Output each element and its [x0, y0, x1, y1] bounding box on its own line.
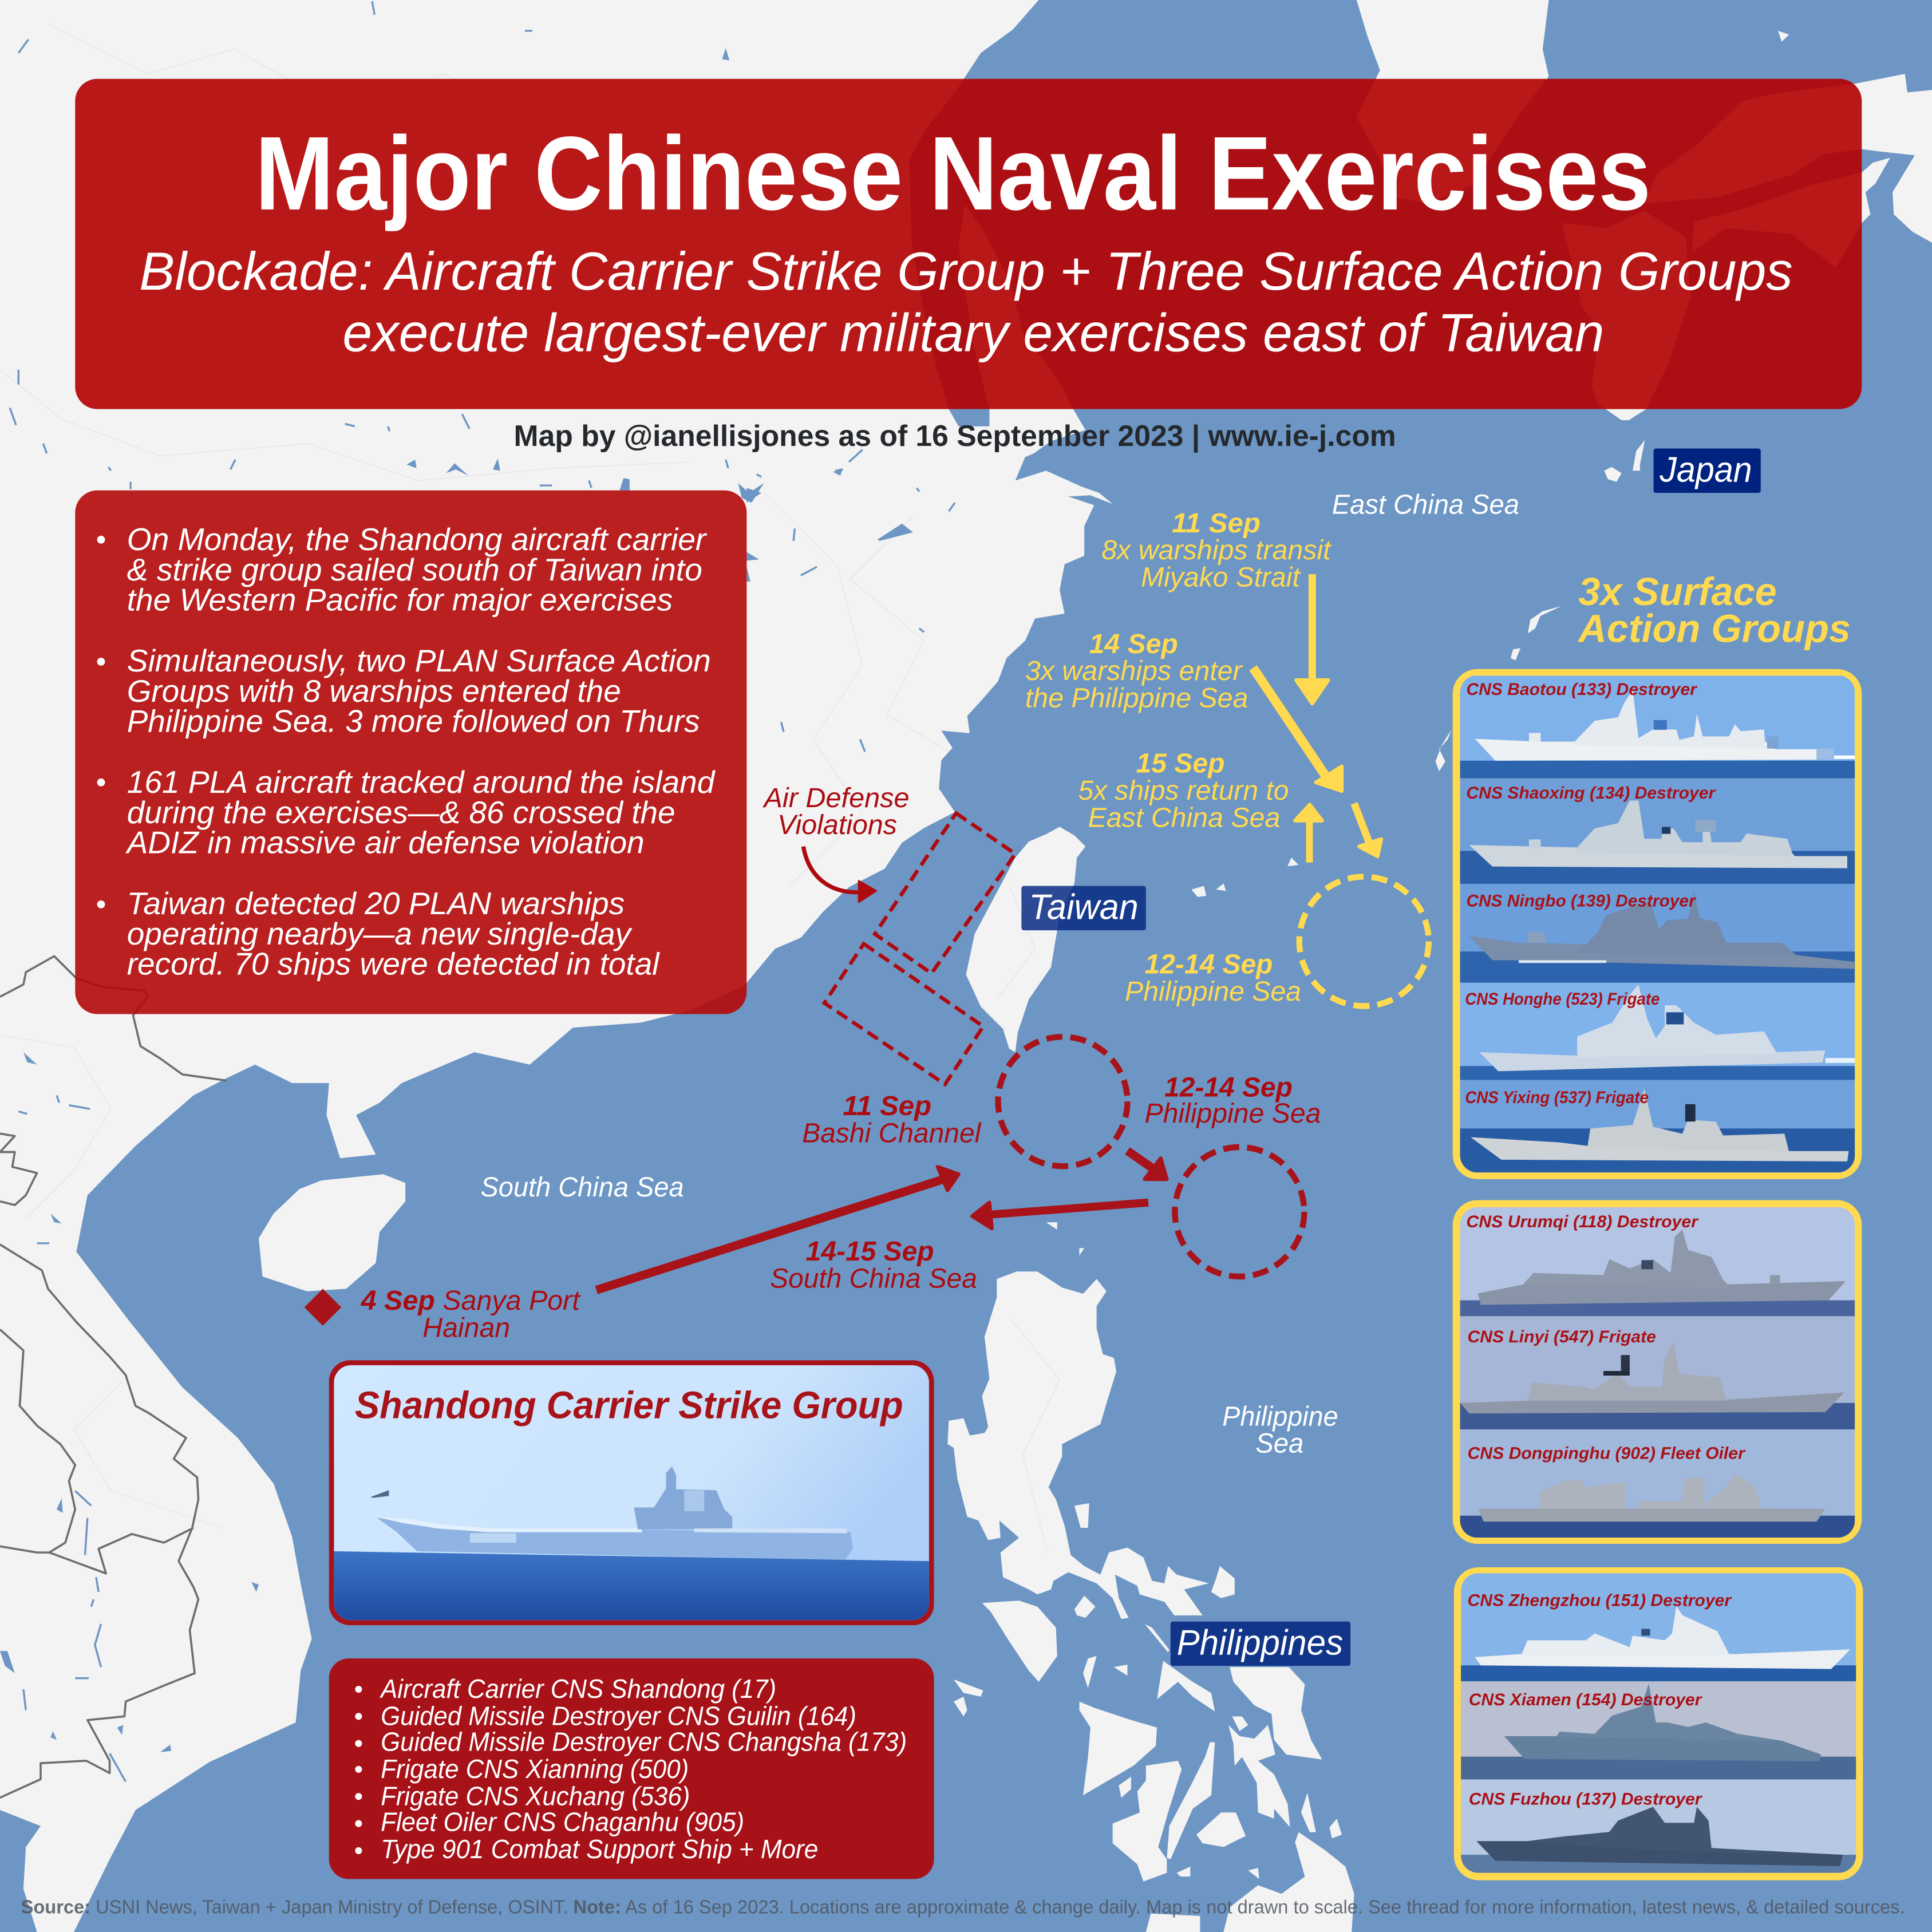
label: Air Defense Violations: Air Defense [762, 783, 909, 813]
ship list text [379, 1674, 907, 1864]
ship names: group 1 [1465, 681, 1716, 1107]
heading: 3x Surface Action Groups [1577, 570, 1851, 650]
inland lakes and rivers [0, 1, 955, 1781]
ship photo: Fuzhou [1460, 1780, 1857, 1873]
label: 12-14 Sep Philippine Sea red [1145, 1072, 1321, 1129]
ship names: group 3: CNS Xiamen (154) Destroyer [1469, 1691, 1702, 1709]
carrier heading: Shandong Carrier Strike Group [355, 1384, 903, 1427]
ship names: group 3: CNS Fuzhou (137) Destroyer [1469, 1790, 1702, 1808]
marker: Sanya port diamond [305, 1289, 341, 1326]
arrow: yellow to circle [1354, 803, 1381, 856]
label: 4 Sep Sanya Port Hainan [361, 1285, 581, 1343]
ship photo: Linyi [1460, 1316, 1855, 1429]
label: 15 Sep return: 5x ships return to [1078, 775, 1289, 806]
label: 4 Sep Sanya Port Hainan: 4 Sep Sanya Port [361, 1285, 581, 1316]
ship names: group 1: CNS Baotou (133) Destroyer [1466, 681, 1698, 699]
label: 12-14 Sep Philippine Sea red: 12-14 Sep [1164, 1072, 1293, 1103]
country label: Taiwan: Taiwan [1029, 887, 1139, 927]
label: 14 Sep enter Philippine Sea: 3x warships enter [1025, 655, 1243, 686]
arrow: yellow return north [1295, 805, 1322, 863]
label: 15 Sep return [1078, 748, 1289, 833]
ship names: group 2: CNS Linyi (547) Frigate [1468, 1328, 1656, 1346]
label: 12-14 Sep Philippine Sea red: Philippine Sea [1145, 1098, 1321, 1129]
bullet: warships detected: Taiwan detected 20 PLAN warships [127, 886, 625, 921]
byline: Map by @ianellisjones as of 16 September 2023 | www.ie-j.com [514, 419, 1396, 453]
ship names: group 3 [1468, 1591, 1732, 1808]
label: 11 Sep Bashi Channel [802, 1091, 982, 1148]
ship photo: Yixing [1460, 1080, 1855, 1172]
ship names: group 2 [1466, 1213, 1745, 1463]
bullet: aircraft tracked: during the exercises—& 86 crossed the [127, 795, 675, 830]
subtitle [139, 241, 1793, 362]
circle: red patrol area Bashi [998, 1037, 1127, 1166]
ship names: group 2: CNS Dongpinghu (902) Fleet Oiler [1468, 1444, 1745, 1463]
bullet: surface action groups: Groups with 8 warships entered the [127, 673, 621, 709]
sea label: South China Sea: South China Sea [480, 1172, 684, 1203]
land: Philippines [947, 1222, 1354, 1932]
ship list text: Guided Missile Destroyer CNS Changsha (173) [381, 1727, 907, 1757]
title: Major Chinese Naval Exercises [255, 114, 1651, 232]
sea label: Philippine Sea: Philippine [1222, 1401, 1338, 1432]
ship list text: Guided Missile Destroyer CNS Guilin (164) [381, 1701, 856, 1730]
zone: air defense violation south [824, 944, 983, 1084]
ship photo: Baotou [1460, 675, 1855, 779]
label: 14-15 Sep South China Sea: 14-15 Sep [806, 1236, 934, 1267]
label: 11 Sep Miyako Strait: 8x warships transit [1101, 535, 1332, 566]
ship list text: Frigate CNS Xuchang (536) [381, 1781, 690, 1811]
label: 14 Sep enter Philippine Sea: the Philippine Sea [1025, 682, 1248, 713]
panel: Shandong carrier photo [329, 1360, 934, 1625]
label: 15 Sep return: 15 Sep [1136, 748, 1225, 779]
label: 15 Sep return: East China Sea [1088, 802, 1280, 833]
bullet: surface action groups: Philippine Sea. 3 more followed on Thurs [127, 704, 700, 739]
label: 12-14 Sep Philippine Sea yellow [1125, 949, 1301, 1007]
label: Air Defense Violations: Violations [777, 809, 897, 840]
subtitle: Blockade: Aircraft Carrier Strike Group + Three Surface Action Groups [139, 241, 1793, 301]
ship names: group 1: CNS Honghe (523) Frigate [1465, 990, 1660, 1009]
arrow: red Sanya to Bashi [596, 1167, 959, 1290]
land: mainland China and Southeast Asia [0, 0, 1094, 1932]
ship list bullets [355, 1686, 362, 1854]
arrow: yellow diagonal [1253, 668, 1342, 791]
label: 11 Sep Bashi Channel: Bashi Channel [802, 1117, 982, 1148]
inland provincial lines [0, 25, 1060, 1552]
bullet: surface action groups: Simultaneously, two PLAN Surface Action [127, 643, 711, 678]
label: 14-15 Sep South China Sea [770, 1236, 977, 1294]
label: 11 Sep Miyako Strait: 11 Sep [1172, 508, 1261, 539]
ship names: group 3: CNS Zhengzhou (151) Destroyer [1468, 1591, 1732, 1610]
bullet: warships detected: record. 70 ships were detected in total [127, 946, 660, 982]
bullet: Shandong sailed [97, 521, 708, 618]
circle: red patrol area Philippine Sea [1175, 1147, 1304, 1277]
land: Hainan [259, 1174, 405, 1291]
arrow: yellow Miyako Strait [1296, 574, 1328, 704]
ship names: group 1: CNS Ningbo (139) Destroyer [1466, 892, 1696, 910]
label: 11 Sep Miyako Strait: Miyako Strait [1141, 562, 1301, 593]
country label: Japan: Japan [1659, 450, 1752, 490]
land: Korea [1357, 0, 1549, 203]
panel: surface action group 2 [1453, 1200, 1862, 1544]
bullet: Shandong sailed: On Monday, the Shandong aircraft carrier [127, 521, 708, 557]
ship list text: Frigate CNS Xianning (500) [381, 1754, 689, 1784]
arrow: air defense curved [803, 847, 876, 902]
panel: title banner [75, 79, 1862, 409]
label: 14 Sep enter Philippine Sea: 14 Sep [1089, 629, 1178, 659]
panel: key points [75, 491, 746, 1014]
ship photo: Xiamen [1460, 1681, 1857, 1780]
subtitle: execute largest-ever military exercises east of Taiwan [342, 302, 1604, 362]
country label: Philippines: Philippines [1177, 1623, 1343, 1663]
label: 12-14 Sep Philippine Sea yellow: 12-14 Sep [1145, 949, 1273, 979]
bullet: aircraft tracked: ADIZ in massive air defense violation [125, 825, 645, 860]
ship photo: Honghe [1460, 983, 1855, 1080]
ship photo: Ningbo [1460, 884, 1855, 983]
arrow: red to South China Sea [972, 1203, 1148, 1228]
panel: surface action group 3 [1454, 1567, 1863, 1880]
label: 14 Sep enter Philippine Sea [1025, 629, 1248, 713]
bullet: Shandong sailed: & strike group sailed south of Taiwan into [127, 552, 702, 587]
ship list text: Fleet Oiler CNS Chaganhu (905) [381, 1807, 744, 1837]
country borders [0, 956, 227, 1797]
heading: 3x Surface Action Groups: 3x Surface [1578, 570, 1777, 614]
sea label: East China Sea: East China Sea [1332, 489, 1519, 520]
panel: carrier group ship list [329, 1658, 934, 1879]
ship photo: Shaoxing [1460, 779, 1855, 884]
label: 11 Sep Miyako Strait [1101, 508, 1332, 593]
land: coastal island near Shanghai [1068, 487, 1113, 504]
ship list text: Aircraft Carrier CNS Shandong (17) [379, 1674, 776, 1704]
ship photo: Dongpinghu [1460, 1429, 1855, 1538]
bullet: surface action groups [97, 643, 711, 739]
label: Air Defense Violations [762, 783, 909, 840]
footer source note: Source: USNI News, Taiwan + Japan Ministry of Defense, OSINT. Note: As of 16 Sep 2023. Locations are approximate & change daily. Map is not drawn to scale. See thread for more information, latest news, & detailed sources. [21, 1897, 1905, 1918]
bullet: warships detected: operating nearby—a new single-day [127, 916, 633, 951]
label: 11 Sep Bashi Channel: 11 Sep [843, 1091, 931, 1121]
circle: yellow patrol area [1299, 876, 1429, 1006]
bullet: aircraft tracked: 161 PLA aircraft tracked around the island [127, 764, 716, 800]
bullet: aircraft tracked [97, 764, 716, 860]
bullet: Shandong sailed: the Western Pacific for major exercises [127, 582, 673, 618]
carrier ship [371, 1467, 853, 1560]
arrow: red between patrol areas [1127, 1151, 1167, 1179]
sea label: Philippine Sea [1222, 1401, 1338, 1459]
ship photo: Urumqi [1460, 1207, 1855, 1316]
sea label: Philippine Sea: Sea [1255, 1428, 1303, 1459]
ship names: group 1: CNS Yixing (537) Frigate [1465, 1089, 1649, 1107]
ship list text: Type 901 Combat Support Ship + More [381, 1834, 818, 1864]
bullet: warships detected [97, 886, 660, 982]
ship names: group 1: CNS Shaoxing (134) Destroyer [1466, 784, 1716, 803]
label: 4 Sep Sanya Port Hainan: Hainan [422, 1312, 510, 1343]
panel: surface action group 1 [1453, 669, 1862, 1179]
ship names: group 2: CNS Urumqi (118) Destroyer [1466, 1213, 1699, 1231]
land: Japan [1191, 31, 1932, 897]
heading: 3x Surface Action Groups: Action Groups [1577, 606, 1851, 650]
label: 12-14 Sep Philippine Sea yellow: Philippine Sea [1125, 976, 1301, 1007]
ship photo: Zhengzhou [1460, 1573, 1857, 1681]
zone: air defense violation north [875, 813, 1016, 973]
land: Taiwan [966, 827, 1085, 1052]
label: 14-15 Sep South China Sea: South China Sea [770, 1263, 977, 1294]
